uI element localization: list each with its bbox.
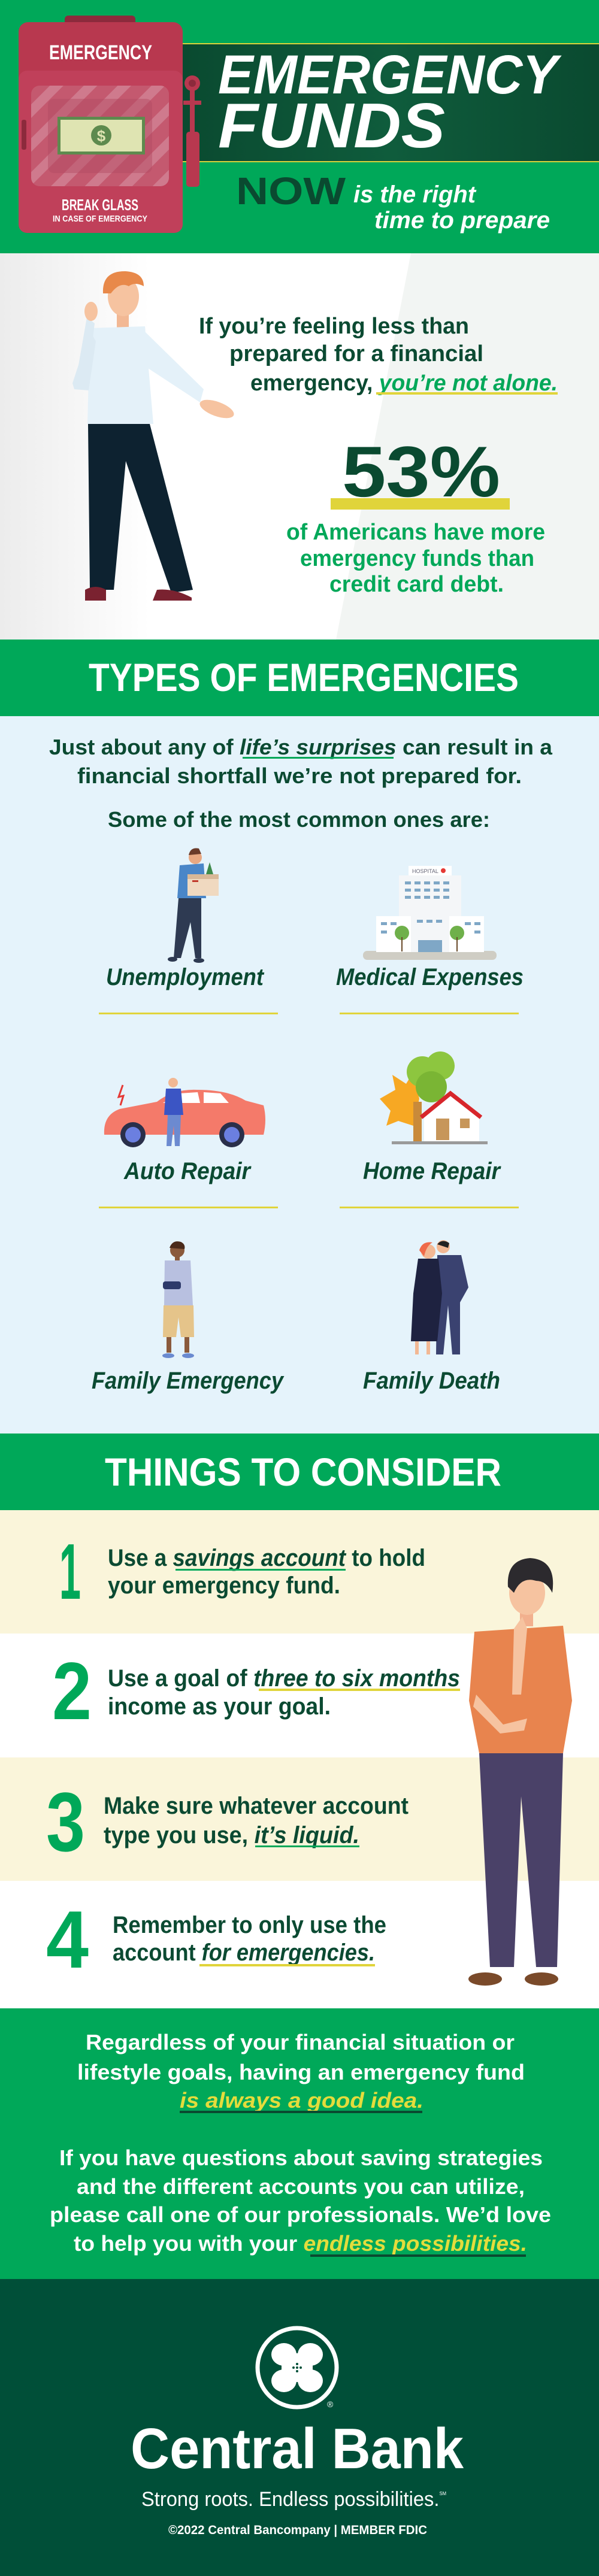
icon: car with man — [104, 1078, 265, 1147]
item: auto repair — [104, 1078, 265, 1184]
illustration: man pointing — [72, 271, 236, 601]
item: auto repair: Auto Repair — [123, 1158, 252, 1184]
panel: not alone stat — [0, 253, 599, 640]
tip 2: Use a goal of three to six months — [108, 1665, 460, 1692]
text: feeling less than prepared: If you’re feeling less than — [199, 314, 469, 339]
tip 1 — [59, 1528, 425, 1616]
text: always a good idea: Regardless of your financial situation or — [86, 2030, 515, 2054]
text: stat description: of Americans have more — [286, 520, 545, 545]
tip 3: 3 — [46, 1775, 85, 1869]
tagline: SM — [439, 2491, 446, 2496]
copyright: ©2022 Central Bancompany | MEMBER FDIC — [168, 2523, 427, 2537]
icon: hospital — [363, 866, 497, 960]
icon: tree on house — [380, 1051, 488, 1144]
text: always a good idea: lifestyle goals, having an emergency fund — [77, 2060, 525, 2084]
icon: emergency box: EMERGENCY — [49, 41, 152, 64]
item: family death — [363, 1240, 500, 1394]
item: medical expenses: Medical Expenses — [336, 964, 524, 990]
item: family emergency — [92, 1241, 285, 1394]
title: EMERGENCY — [218, 44, 562, 105]
item: family emergency: Family Emergency — [92, 1368, 285, 1394]
item: family death: Family Death — [363, 1368, 500, 1394]
heading: types of emergencies — [0, 640, 599, 716]
text: feeling less than prepared: prepared for a financial — [229, 341, 483, 366]
subtitle — [236, 169, 550, 234]
item: home repair: Home Repair — [363, 1158, 501, 1184]
text: stat description: emergency funds than — [300, 546, 534, 571]
icon: dollar bill: $ — [97, 127, 106, 145]
panel: types of emergencies — [0, 716, 599, 1434]
tip 3: Make sure whatever account — [104, 1793, 409, 1819]
icon: grieving couple — [411, 1240, 468, 1354]
subtitle: NOW — [236, 169, 346, 213]
text: stat description — [286, 520, 545, 597]
logo: dogwood flower — [258, 2328, 337, 2409]
tip 2: income as your goal. — [108, 1693, 331, 1720]
heading: types of emergencies: TYPES OF EMERGENCIES — [89, 655, 519, 699]
text: call professionals: If you have questions about saving strategies — [59, 2145, 543, 2170]
item: home repair — [363, 1051, 501, 1184]
footer: Central Bank — [0, 2279, 599, 2576]
panel: things to consider — [0, 1510, 599, 2008]
title: FUNDS — [218, 90, 445, 161]
tip 3 — [46, 1775, 409, 1869]
tip 1: your emergency fund. — [108, 1572, 340, 1599]
text: call professionals — [50, 2145, 551, 2257]
text: call professionals: to help you with your endless possibilities. — [74, 2231, 527, 2256]
logo: dogwood flower: ® — [327, 2399, 334, 2409]
icon: emergency box — [19, 16, 201, 233]
tip 4 — [46, 1894, 386, 1985]
subtitle: time to prepare — [374, 207, 550, 234]
item: medical expenses — [336, 866, 524, 990]
brand name: Central Bank — [131, 2417, 464, 2481]
icon: emergency box: BREAK GLASS — [62, 196, 138, 214]
icon: emergency box: IN CASE OF EMERGENCY — [53, 214, 147, 224]
text: feeling less than prepared: emergency, you’re not alone. — [250, 371, 558, 396]
intro text: financial shortfall we’re not prepared for. — [77, 763, 522, 788]
title band — [183, 43, 599, 162]
icon: boy with sling — [162, 1241, 194, 1358]
text: always a good idea — [77, 2030, 525, 2113]
icon: man with box — [168, 848, 219, 963]
intro text: Just about any of life’s surprises can result in a — [49, 735, 553, 759]
intro text: Some of the most common ones are: — [108, 807, 490, 832]
lever — [184, 75, 200, 91]
tip 2 — [52, 1645, 460, 1736]
tagline: Strong roots. Endless possibilities. — [141, 2488, 452, 2511]
subtitle: is the right — [353, 181, 477, 208]
tip 4: Remember to only use the — [113, 1912, 386, 1938]
text: call professionals: and the different accounts you can utilize, — [77, 2174, 525, 2199]
intro text — [49, 735, 553, 832]
item: unemployment — [106, 848, 265, 990]
tip 1: 1 — [59, 1528, 81, 1616]
tip 4: account for emergencies. — [113, 1939, 375, 1966]
icon: hospital: HOSPITAL — [412, 868, 438, 874]
tip 2: 2 — [52, 1645, 92, 1736]
tip 3: type you use, it’s liquid. — [104, 1822, 359, 1848]
tip 1: Use a savings account to hold — [108, 1545, 425, 1571]
icon: dollar bill — [58, 117, 145, 154]
item: unemployment: Unemployment — [106, 964, 265, 990]
title — [218, 44, 562, 161]
text: feeling less than prepared — [199, 314, 558, 396]
text: stat description: credit card debt. — [329, 572, 504, 597]
text: call professionals: please call one of our professionals. We’d love — [50, 2202, 551, 2227]
header panel — [0, 0, 599, 253]
illustration: thinking man — [468, 1558, 572, 1986]
panel: closing message — [0, 2008, 599, 2279]
tip 4: 4 — [46, 1894, 89, 1985]
heading: things to consider — [0, 1434, 599, 1510]
stat: 53%: 53% — [342, 432, 500, 512]
text: always a good idea: is always a good idea. — [180, 2088, 423, 2113]
heading: things to consider: THINGS TO CONSIDER — [105, 1450, 501, 1494]
